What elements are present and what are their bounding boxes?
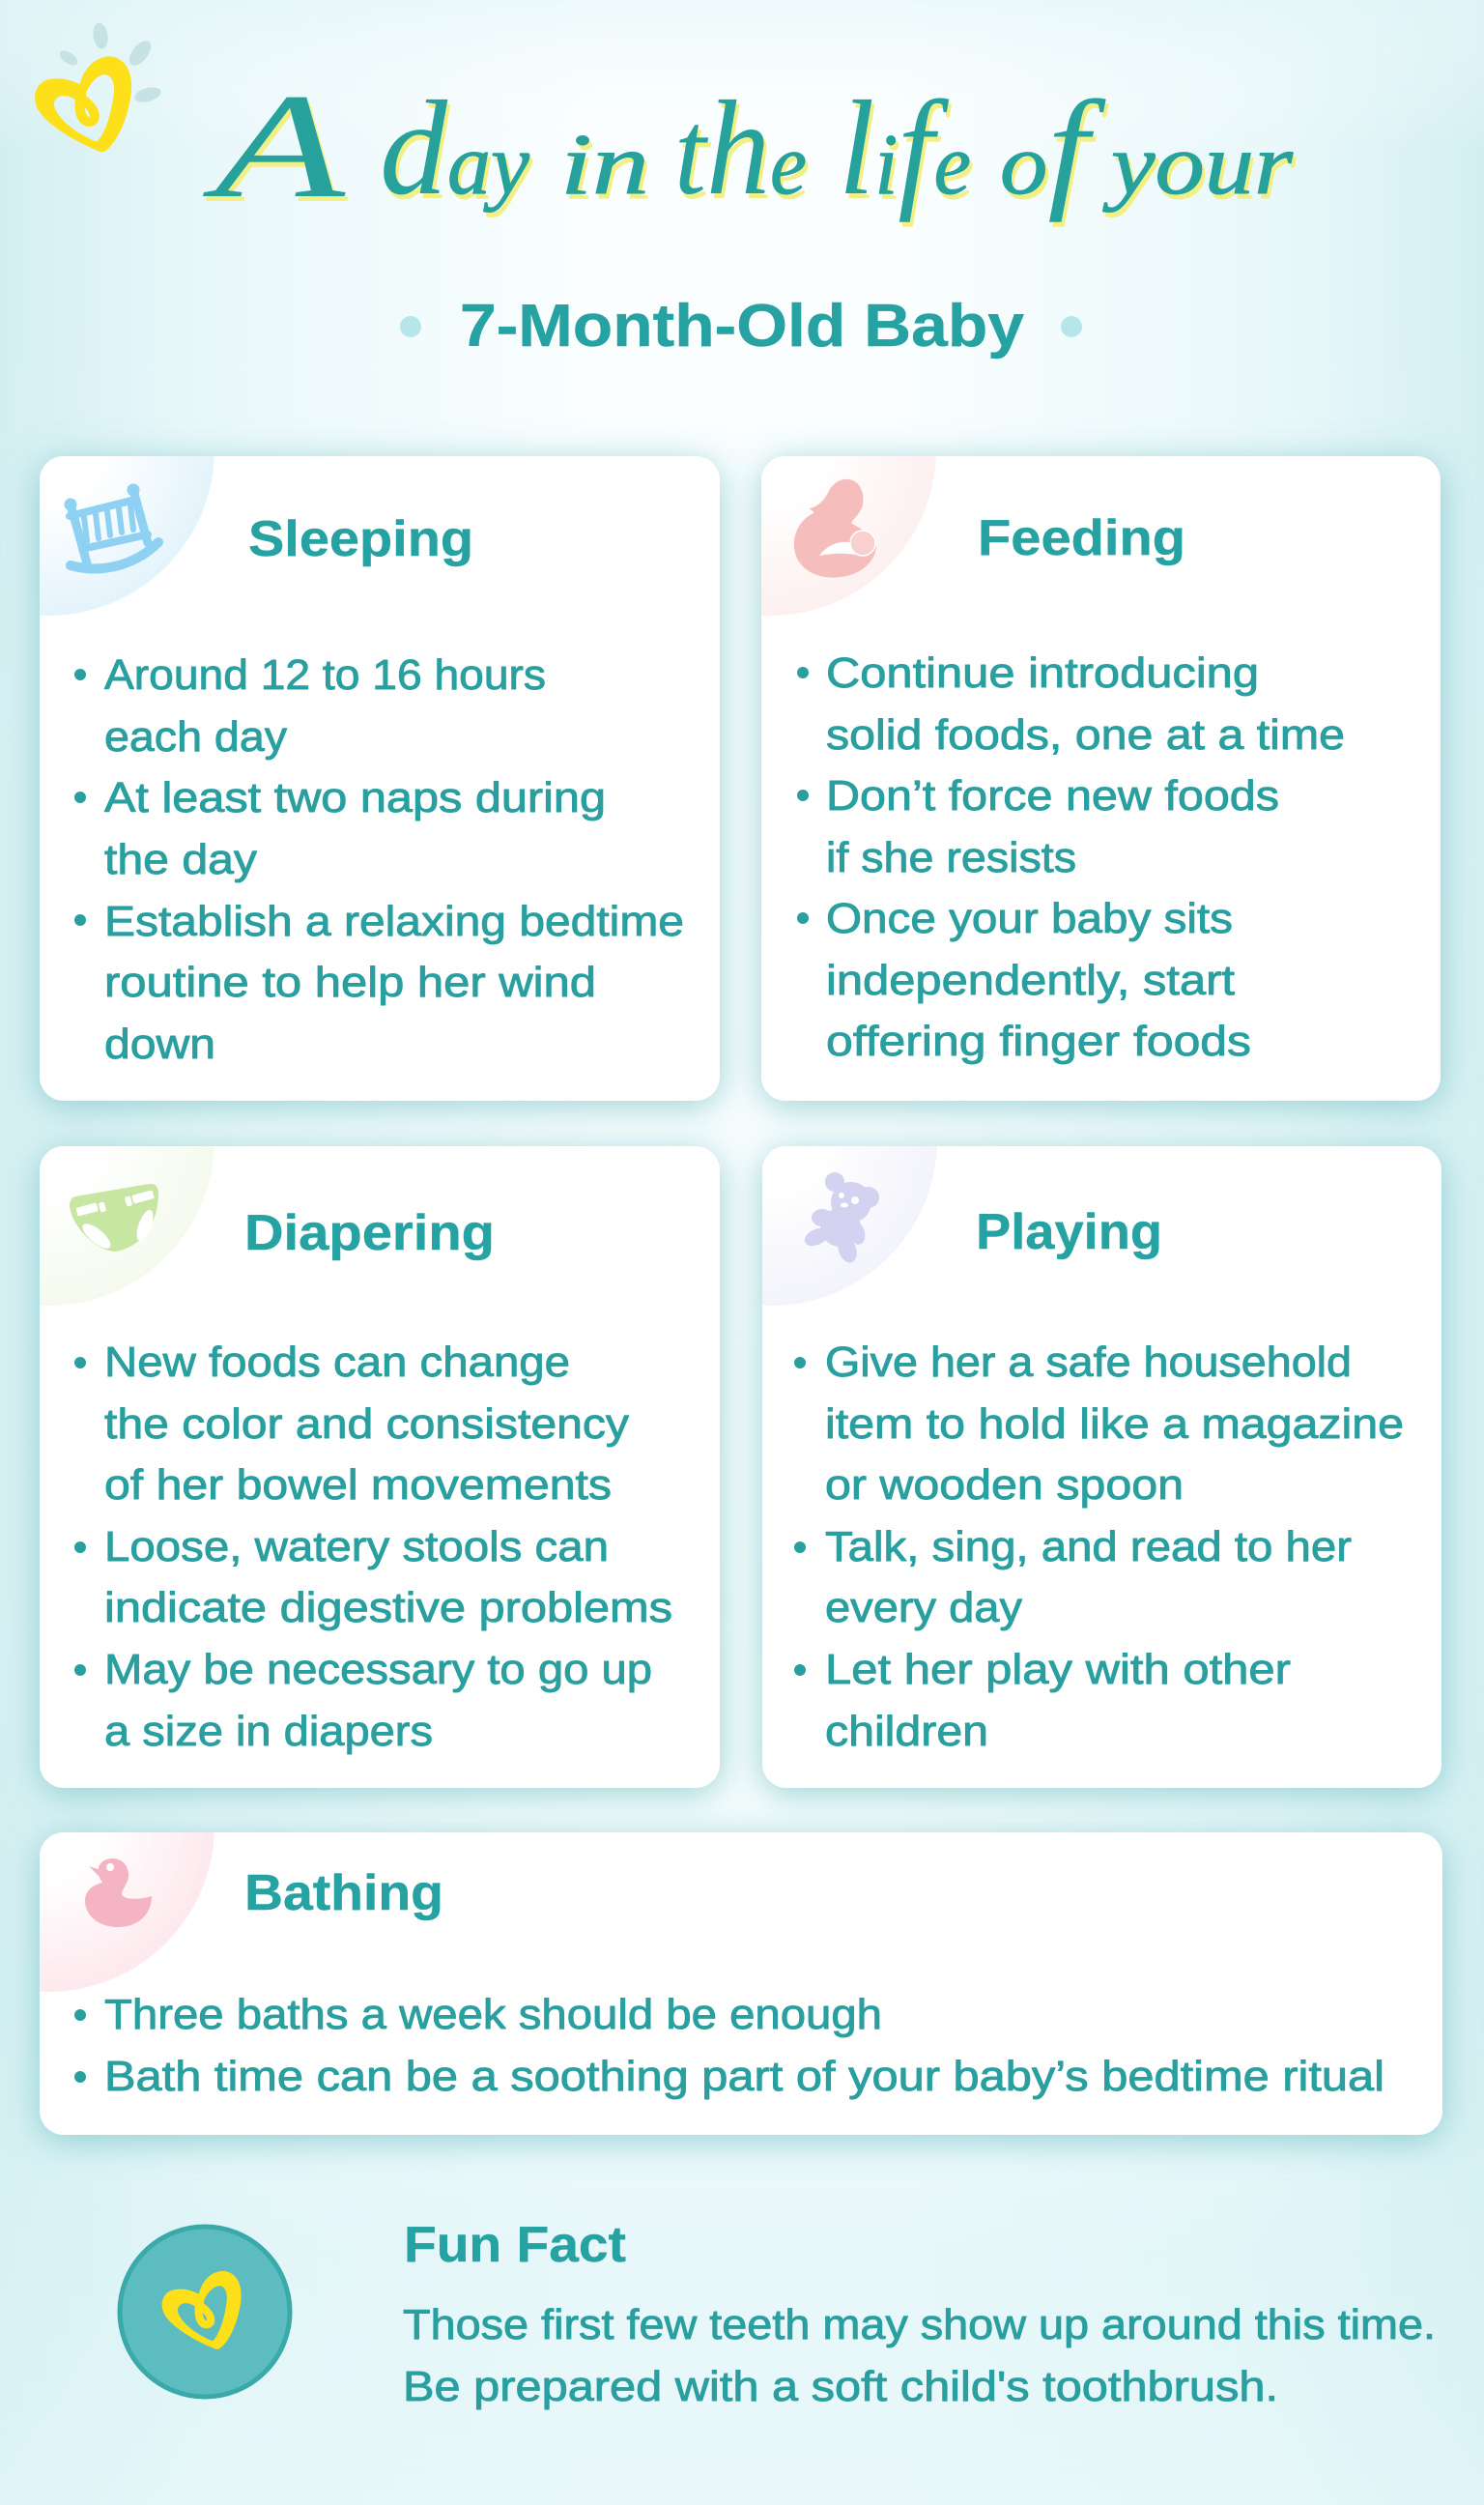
bullet list: Loose, watery stools can: [104, 1523, 609, 1570]
title: the: [674, 73, 807, 223]
icon: rocking crib: [65, 484, 158, 568]
icon: rubber duck: [85, 1858, 152, 1927]
icon: mother feeding baby: [794, 479, 876, 578]
bullet list: [74, 651, 684, 1068]
bullet list: independently, start: [826, 957, 1235, 1004]
panel: sleeping: [19, 439, 742, 1129]
bullet list: Don’t force new foods: [826, 772, 1279, 820]
bullet list: Around 12 to 16 hours: [104, 651, 546, 699]
bullet list: At least two naps during: [104, 774, 606, 821]
icon: diaper: [70, 1184, 158, 1252]
bullet list: down: [104, 1021, 215, 1068]
bullet list: the color and consistency: [104, 1400, 629, 1448]
icon: fun fact heart badge: [120, 2227, 290, 2397]
bullet list: each day: [104, 713, 287, 761]
bullet list: [797, 649, 1345, 1065]
title: of: [1000, 73, 1107, 223]
bullet list: Continue introducing: [826, 649, 1259, 697]
bullet list: offering finger foods: [826, 1018, 1251, 1065]
heading: Feeding: [978, 510, 1185, 566]
fun fact text: Be prepared with a soft child's toothbrush.: [403, 2363, 1278, 2410]
heading: Bathing: [244, 1865, 443, 1921]
subtitle: 7-Month-Old Baby: [460, 293, 1025, 360]
panel: feeding: [739, 439, 1461, 1129]
bullet list: item to hold like a magazine: [825, 1400, 1404, 1448]
fun fact text: Fun Fact: [404, 2217, 626, 2273]
bullet list: the day: [104, 836, 257, 883]
bullet list: children: [825, 1708, 988, 1755]
bullet list: Give her a safe household: [825, 1339, 1352, 1386]
title: life: [839, 73, 971, 223]
icon: teddy bear: [802, 1172, 879, 1265]
bullet list: routine to help her wind: [104, 959, 596, 1006]
bullet list: New foods can change: [104, 1339, 570, 1386]
bullet list: of her bowel movements: [104, 1461, 612, 1509]
bullet list: Talk, sing, and read to her: [825, 1523, 1352, 1570]
bullet list: Bath time can be a soothing part of your baby’s bedtime ritual: [104, 2053, 1384, 2100]
heading: Diapering: [244, 1205, 495, 1261]
icon: brand heart logo with rays: [35, 22, 162, 152]
title: [202, 63, 1294, 229]
heading: Playing: [976, 1204, 1162, 1260]
bullet list: [74, 1991, 1384, 2100]
bullet list: Three baths a week should be enough: [104, 1991, 882, 2038]
panel: diapering: [19, 1130, 742, 1817]
fun fact text: Those first few teeth may show up around this time.: [403, 2301, 1436, 2348]
bullet list: May be necessary to go up: [104, 1646, 652, 1693]
bullet list: if she resists: [826, 834, 1076, 881]
panel: bathing: [19, 1816, 1463, 2163]
title: A: [202, 63, 347, 229]
title: in: [560, 117, 649, 213]
title: day: [380, 73, 529, 223]
bullet list: Once your baby sits: [826, 895, 1233, 942]
title: your: [1102, 117, 1294, 213]
fun fact text: [403, 2217, 1436, 2410]
bullet list: a size in diapers: [104, 1708, 433, 1755]
bullet list: Establish a relaxing bedtime: [104, 898, 684, 945]
bullet list: [74, 1339, 672, 1755]
bullet list: indicate digestive problems: [104, 1584, 672, 1631]
bullet list: or wooden spoon: [825, 1461, 1184, 1509]
bullet list: Let her play with other: [825, 1646, 1291, 1693]
bullet list: every day: [825, 1584, 1022, 1631]
bullet list: [794, 1339, 1404, 1755]
heading: Sleeping: [248, 511, 473, 567]
panel: playing: [740, 1130, 1463, 1817]
bullet list: solid foods, one at a time: [826, 711, 1345, 759]
